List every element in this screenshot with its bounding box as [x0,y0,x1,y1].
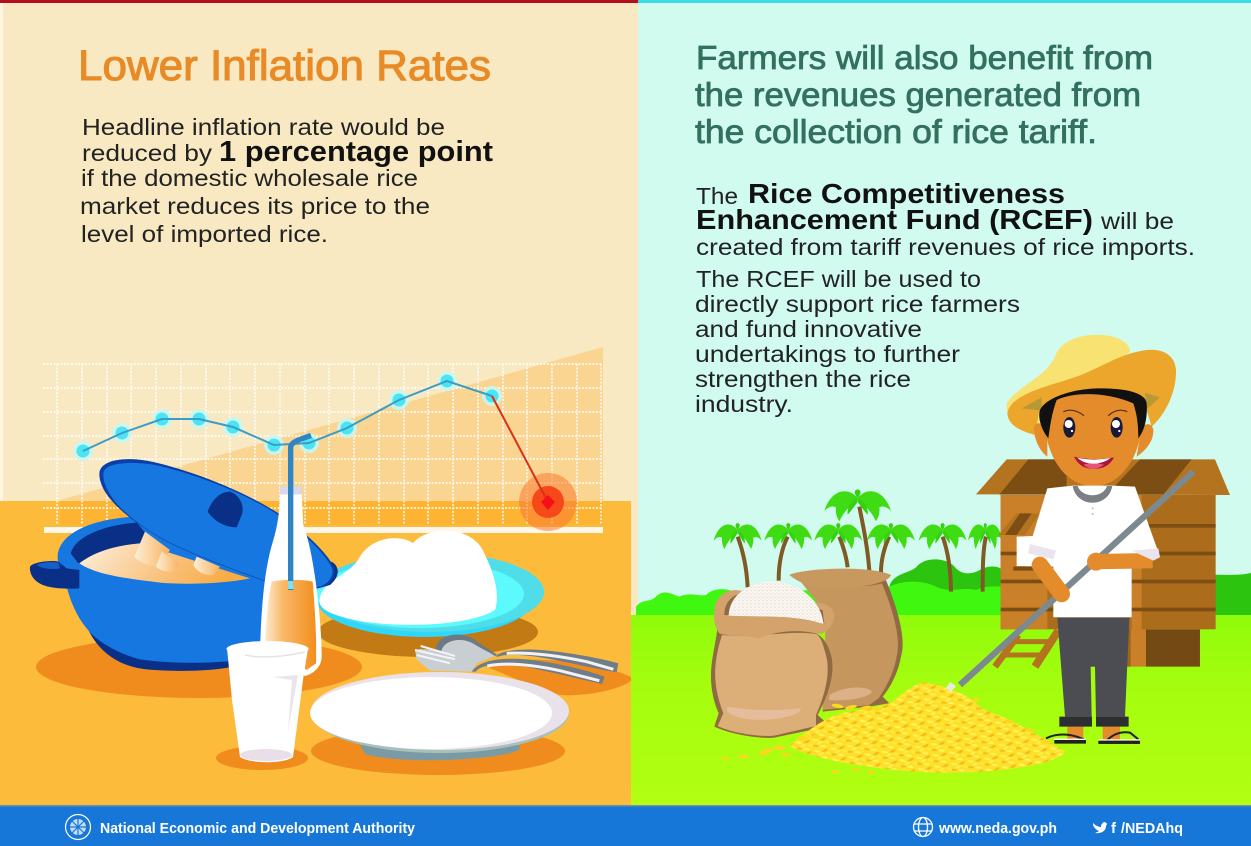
text block: headline inflation: market reduces its price to the [80,193,430,219]
text block: headline inflation: level of imported rice. [81,221,328,247]
smile [1074,457,1114,469]
hedges [636,559,1251,615]
heading: farmers benefit: Farmers will also benefit from [696,39,1153,76]
text block: RCEF use: undertakings to further [695,341,960,367]
rice sacks [711,569,903,738]
white dinner plate [310,672,569,775]
text block: headline inflation [80,114,493,247]
chart line [73,371,502,461]
drinking glass [216,641,308,770]
icon: twitter bird [1093,822,1107,833]
palm trees [714,490,1003,592]
hat underside [1022,393,1160,411]
rake head [946,682,956,692]
ears [1034,423,1153,457]
shirt buttons [1092,507,1094,515]
grain pile [721,683,1065,774]
text block: RCEF description: will be [1100,208,1174,234]
text block: headline inflation: if the domestic wholesale rice [81,165,418,191]
heading: farmers benefit [695,39,1153,150]
social handle: f [1111,820,1117,837]
panel: lower inflation background [0,0,640,846]
rice plate [316,531,544,657]
back sack [789,569,903,712]
red target point [492,396,577,531]
text block: RCEF use: strengthen the rice [695,366,911,392]
heading: lower inflation rates: Lower Inflation Rates [78,42,491,90]
text block: RCEF description [696,178,1195,260]
icon: NEDA seal [66,814,90,840]
heading: farmers benefit: the collection of rice tariff. [695,113,1097,150]
hat back [1007,335,1130,433]
grass [631,615,1251,806]
farmer with rake [960,335,1193,744]
text block: RCEF description: Enhancement Fund (RCEF) [696,204,1093,235]
cooking pot with lid [30,459,362,698]
arms [1028,544,1160,594]
face [1045,392,1142,486]
agency name: National Economic and Development Authority [100,820,416,837]
text block: RCEF description: Rice Competitiveness [748,178,1065,209]
rake handle [960,472,1193,685]
spoons and forks [415,634,633,695]
text block: headline inflation: Headline inflation rate would be [82,114,445,140]
pants [1057,618,1129,717]
text block: RCEF use [695,266,1020,417]
shirt [1017,486,1160,617]
heading: farmers benefit: the revenues generated from [695,76,1141,113]
juice bottle with straw [260,435,322,676]
front sack [711,582,834,738]
text block: headline inflation: reduced by [82,140,213,166]
social handle: /NEDAhq [1121,820,1183,837]
text block: RCEF description: created from tariff revenues of rice imports. [696,234,1195,260]
website: www.neda.gov.ph [938,820,1057,837]
icon: globe [914,818,932,836]
footer bar [0,805,1251,846]
pot lid [99,459,338,589]
panel: farmers background [638,0,1251,620]
nipa hut [976,459,1230,667]
hat brim [1007,350,1176,435]
text block: RCEF description: The [696,183,738,209]
farm scene background [631,490,1251,806]
collar [1073,486,1112,503]
eyes [1063,410,1127,438]
text block: RCEF use: and fund innovative [695,316,922,342]
ladder [995,631,1058,667]
feet and sandals [1046,717,1140,744]
text block: RCEF use: industry. [695,391,793,417]
hair [1039,388,1147,438]
text block: RCEF use: The RCEF will be used to [696,266,981,292]
text block: RCEF use: directly support rice farmers [695,291,1020,317]
chart: inflation line dropping [43,347,603,533]
text block: headline inflation: 1 percentage point [219,136,493,168]
top colour bars [0,0,1251,3]
